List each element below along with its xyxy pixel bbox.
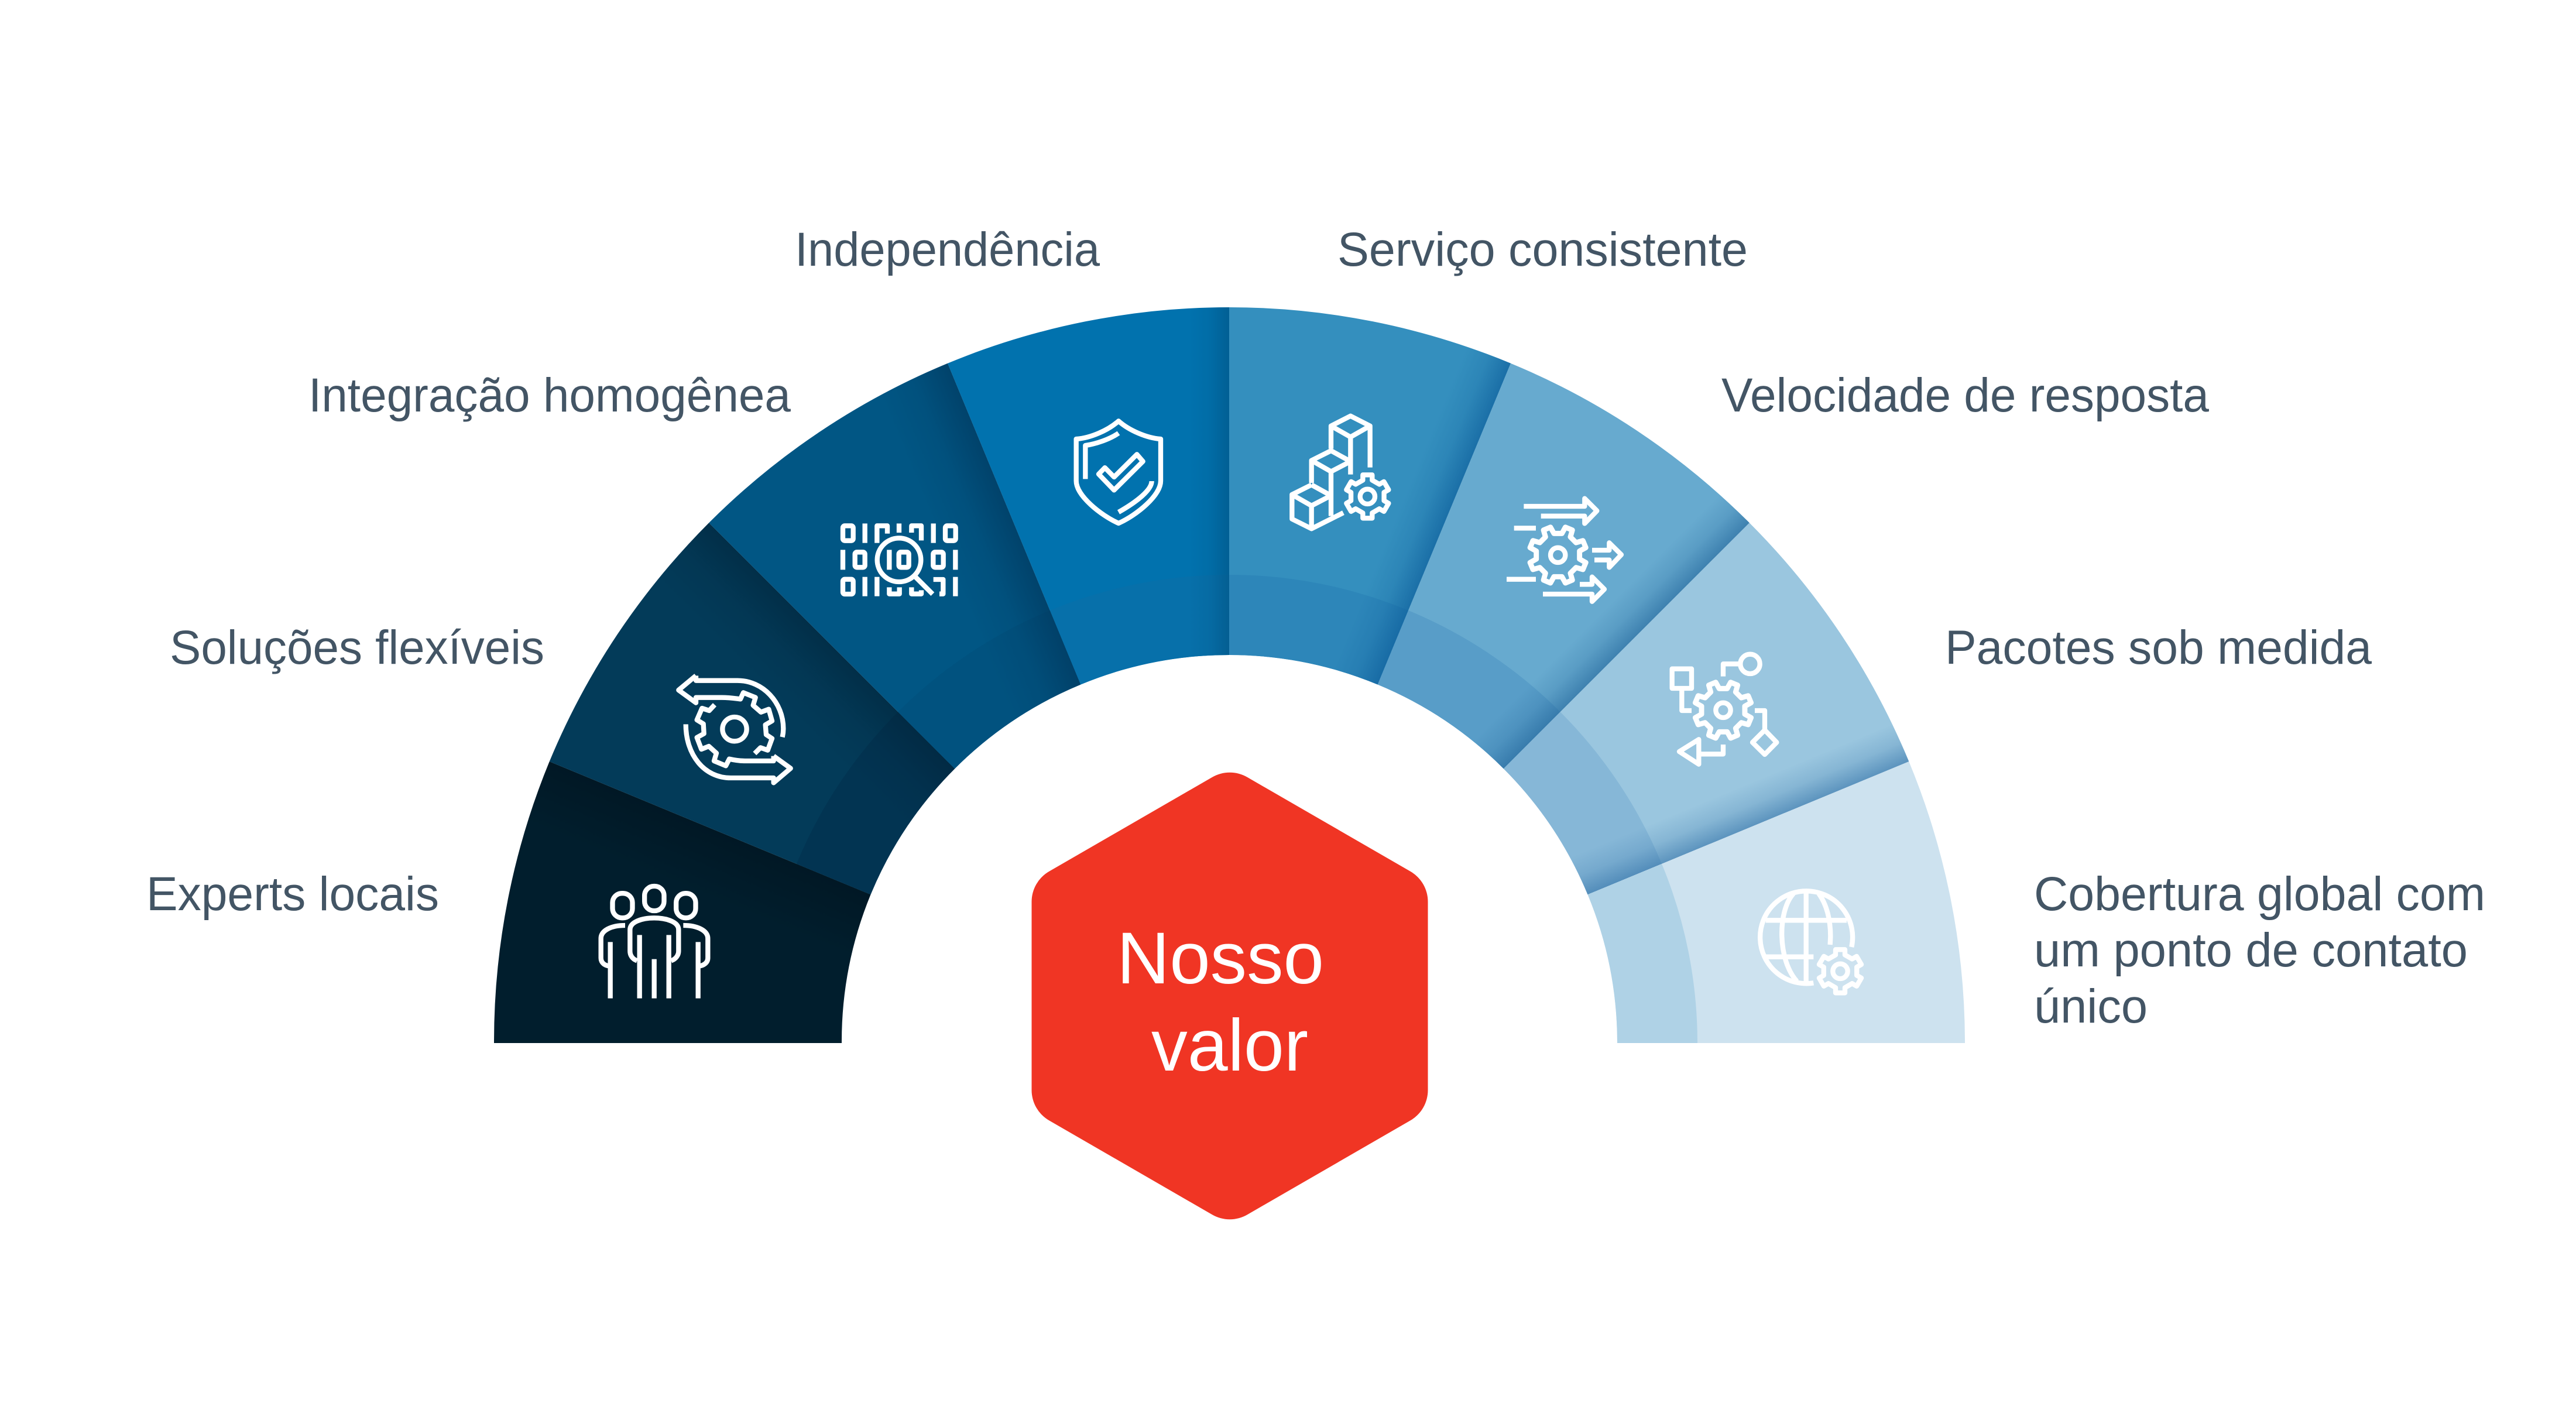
wedge 6 shadow <box>1378 363 1750 769</box>
wedge 3 shadow <box>709 363 1081 769</box>
wedge 7 shadow <box>1504 523 1909 894</box>
label: Experts locais: Experts locais <box>146 867 439 921</box>
label: Soluções flexíveis: Soluções flexíveis <box>170 621 544 674</box>
label: Pacotes sob medida: Pacotes sob medida <box>1945 621 2372 674</box>
wedge 5 <box>1229 307 1511 685</box>
icon: gear with workflow shapes <box>1672 654 1776 764</box>
wedge 3 inner band <box>898 610 1081 769</box>
panel: segment Cobertura global <box>1587 762 1965 1043</box>
wedge 7 inner band <box>1504 712 1662 894</box>
label: Serviço consistente: Serviço consistente <box>1337 223 1748 276</box>
wedge 2 shadow <box>550 523 955 894</box>
wedge 3 <box>709 363 1081 769</box>
panel: segment Velocidade de resposta <box>1378 363 1750 769</box>
wedge 6 inner band <box>1378 610 1560 769</box>
wedge 1 <box>494 762 871 1043</box>
wedge 5 shadow <box>1229 307 1511 685</box>
icon: stacked cubes with gear <box>1292 416 1388 529</box>
center text: valor <box>1151 1005 1308 1086</box>
label: Cobertura global com um ponto de contato único: um ponto de contato <box>2034 924 2468 977</box>
wedge 7 <box>1504 523 1909 894</box>
icon: gear with speed arrows <box>1507 499 1621 602</box>
center text: Nosso <box>1117 918 1324 999</box>
icon: team of people <box>601 886 708 999</box>
icon: shield with check <box>1076 421 1161 523</box>
icon: globe with gear <box>1760 891 1861 993</box>
wedge 4 shadow <box>948 307 1229 685</box>
wedge 1 shadow <box>494 762 871 1043</box>
hexagon shape <box>1031 773 1428 1219</box>
icon: binary code with magnifier <box>843 523 956 596</box>
label: Cobertura global com um ponto de contato único: Cobertura global com <box>2034 867 2485 921</box>
wedge 2 inner band <box>797 712 955 894</box>
wedge 6 <box>1378 363 1750 769</box>
panel: segment Pacotes sob medida <box>1504 523 1909 894</box>
wedge 4 inner band <box>1050 575 1229 685</box>
wedge 4 <box>948 307 1229 685</box>
wedge 2 <box>550 523 955 894</box>
wedge 8 <box>1587 762 1965 1043</box>
label: Velocidade de resposta: Velocidade de resposta <box>1721 369 2209 422</box>
center text <box>1117 918 1324 1086</box>
wedge 5 inner band <box>1229 575 1408 685</box>
label: Cobertura global com um ponto de contato único <box>2034 867 2485 1033</box>
label: Integração homogênea: Integração homogênea <box>308 369 791 422</box>
label: Cobertura global com um ponto de contato único: único <box>2034 980 2148 1033</box>
label: Independência: Independência <box>795 223 1100 276</box>
panel: segment Integração homogênea <box>709 363 1081 769</box>
panel: segment Independência <box>948 307 1229 685</box>
panel: segment Experts locais <box>494 762 871 1043</box>
wedge 8 inner band <box>1587 864 1697 1043</box>
center hexagon: Nosso valor <box>1031 773 1428 1219</box>
panel: segment Soluções flexíveis <box>550 523 955 894</box>
panel: segment Serviço consistente <box>1229 307 1511 685</box>
icon: gear with circular arrows <box>678 675 791 783</box>
